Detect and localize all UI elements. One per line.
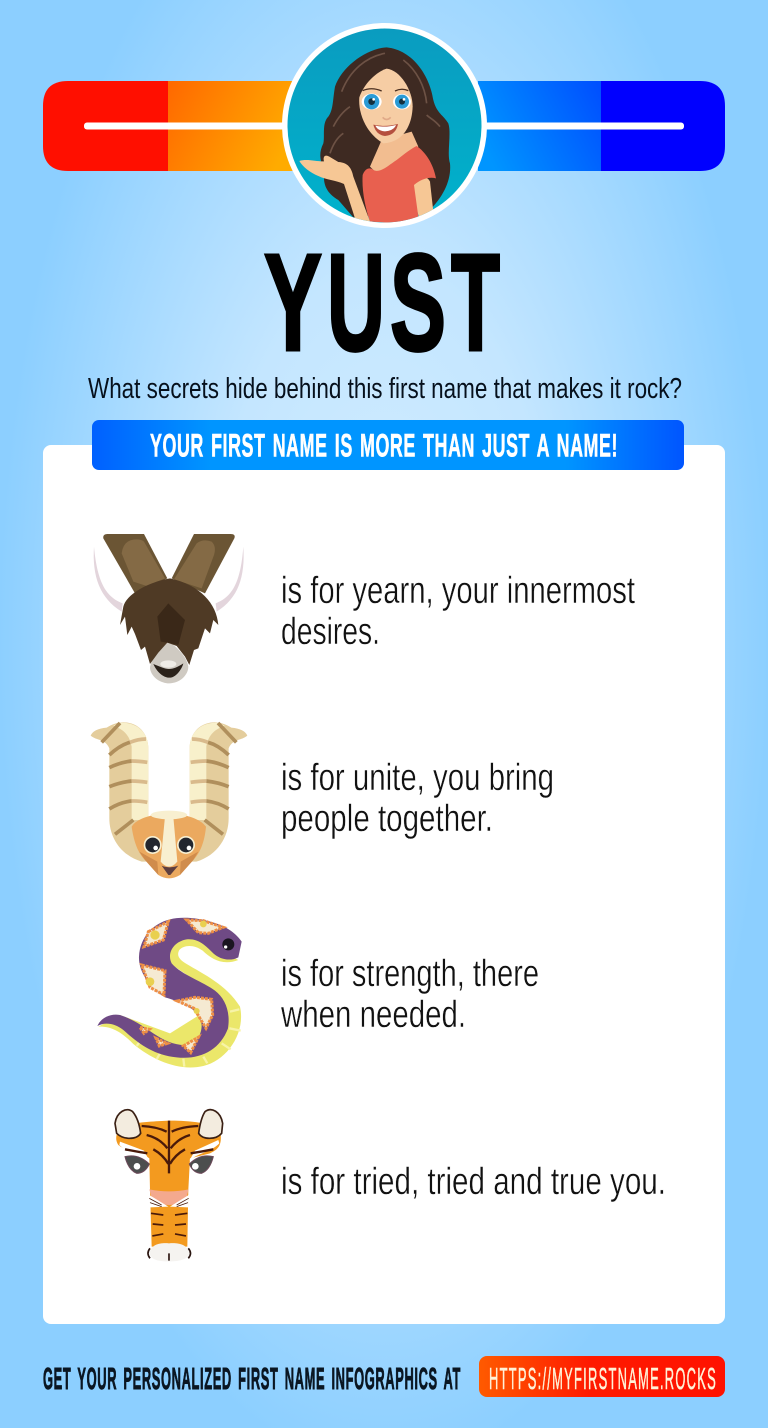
avatar: cartoon woman in circle [282,23,487,228]
shirt [362,146,436,223]
text: S line: when needed. [280,994,466,1036]
title: U [327,226,385,380]
icon: yak letter Y [94,534,244,683]
text: Y line: desires. [281,611,380,653]
eyebrows [363,89,408,91]
icon: snake letter S [97,918,242,1067]
neck and chest [370,132,418,171]
text: U line [281,757,554,840]
title [264,226,500,380]
title: Y [264,226,322,380]
text: T line: is for tried, tried and true you. [281,1161,666,1203]
title: S [390,226,446,380]
text: U line: is for unite, you bring [281,757,554,799]
icon: ram letter U [91,722,247,878]
face [359,69,413,143]
eyes [362,94,382,110]
banner [92,420,684,470]
text: S line [280,953,539,1036]
right arm [414,178,433,216]
text: S line: is for strength, there [281,953,539,995]
nose [383,117,391,119]
text: Y line: is for yearn, your innermost [281,570,635,612]
white content panel [43,445,725,1324]
text: U line: people together. [281,798,493,840]
icon: tiger letter T [115,1110,223,1261]
hair [320,47,450,217]
text: Y line [281,570,635,653]
left arm and hand [299,156,370,222]
mouth [373,124,398,136]
header colour bar [43,81,725,171]
title: T [451,226,500,380]
